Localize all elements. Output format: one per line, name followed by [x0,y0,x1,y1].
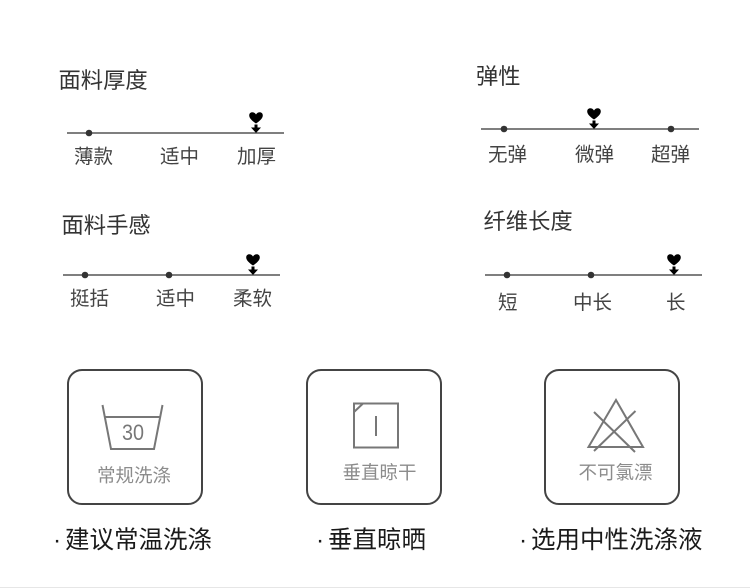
icon: heart marker on soft [246,254,260,275]
scale labels: fabric thickness: 薄款 [74,146,113,168]
icon: vertical drying square [354,404,398,448]
scale line: fabric thickness [67,132,284,134]
icon: heart marker on slight stretch [587,108,601,129]
panel: fabric feel [62,213,280,310]
scale labels: fibre length: 长 [666,292,686,314]
caption: use neutral detergent: 选用中性洗涤液 [531,526,702,554]
caption: wash at normal temperature: · [53,527,61,554]
icon: heart marker on thick [249,112,263,133]
panel: no bleach card [545,370,679,504]
icon: wash tub 30 degrees: 30 [122,420,144,445]
scale labels: fibre length [498,292,686,314]
icon: heart marker on long [667,254,681,275]
scale labels: fabric thickness [74,146,276,168]
icon: crossed triangle [588,400,643,452]
heading: fabric feel: 面料手感 [62,213,151,238]
scale labels: elasticity: 微弹 [575,144,614,166]
panel: drip dry card [307,370,441,504]
scale line: elasticity [481,128,699,130]
scale dots: elasticity [501,126,674,132]
scale labels: fabric feel: 柔软 [233,288,272,310]
caption: dry vertically: · [316,527,324,554]
panel: elasticity [476,64,699,166]
scale labels: fabric thickness: 适中 [160,146,199,168]
caption: dry vertically: 垂直晾晒 [328,526,426,554]
scale labels: fabric feel: 适中 [156,288,195,310]
caption: wash at normal temperature: 建议常温洗涤 [65,526,212,554]
card label: drip dry: 垂直晾干 [342,462,417,483]
heading: elasticity: 弹性 [476,64,521,89]
caption: use neutral detergent: · [519,527,527,554]
card label: no bleach: 不可氯漂 [578,462,653,483]
heading: fibre length: 纤维长度 [484,209,573,234]
panel: fibre length [484,209,702,314]
scale labels: fibre length: 中长 [573,292,612,314]
scale dots: fibre length [504,272,594,278]
scale labels: elasticity: 超弹 [651,144,690,166]
scale dots: fabric feel [82,272,172,278]
panel: regular wash card [68,370,202,504]
heading: fabric thickness: 面料厚度 [58,68,148,93]
scale labels: fibre length: 短 [498,292,518,314]
scale line: fabric feel [63,274,280,276]
scale labels: fabric feel: 挺括 [70,288,109,310]
scale labels: fabric thickness: 加厚 [237,146,276,168]
card label: regular wash: 常规洗涤 [97,465,171,486]
scale labels: elasticity [488,144,690,166]
scale labels: elasticity: 无弹 [488,144,527,166]
scale dot: thin [86,130,92,136]
scale labels: fabric feel [70,288,272,310]
panel: fabric thickness [58,68,284,168]
scale line: fibre length [485,274,702,276]
